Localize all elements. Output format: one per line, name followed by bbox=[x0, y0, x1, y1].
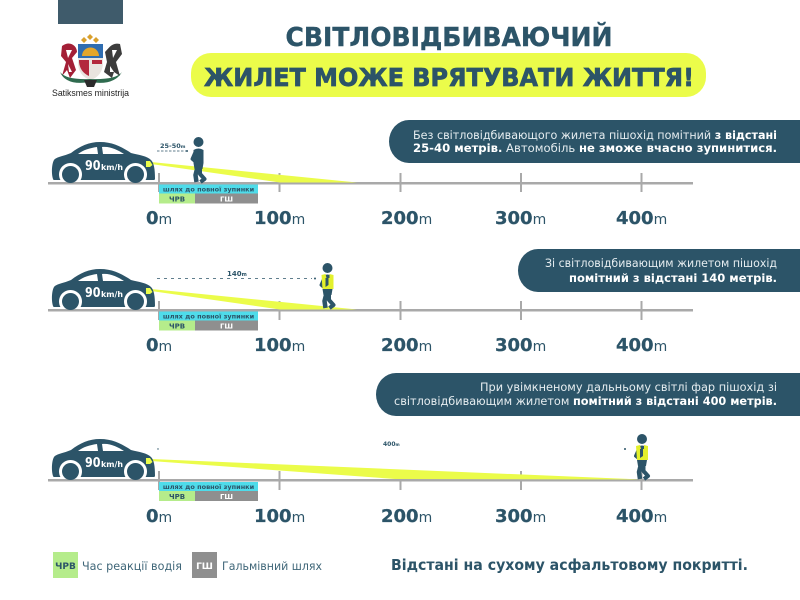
distance labels 1: 400m bbox=[616, 208, 667, 229]
road axis 1 bbox=[48, 173, 693, 192]
callout 3: При увімкненому дальньому світлі фар пішохід зі bbox=[480, 381, 777, 394]
callout 3 bbox=[376, 373, 800, 416]
stopping distance bars 1: ЧРВ bbox=[169, 196, 185, 204]
car 1 bbox=[52, 142, 155, 183]
distance labels 2: 100m bbox=[254, 335, 305, 356]
legend item: reaction time: Час реакції водія bbox=[82, 559, 182, 573]
distance labels 1: 100m bbox=[254, 208, 305, 229]
stopping distance bars 2: ЧРВ bbox=[169, 322, 185, 330]
legend item: reaction time: ЧРВ bbox=[55, 562, 76, 572]
stopping distance bars 3: ЧРВ bbox=[169, 493, 185, 501]
callout 3: світловідбивающим жилетом помітний з відстані 400 метрів. bbox=[394, 395, 777, 408]
distance labels 3 bbox=[146, 506, 667, 527]
distance labels 3: 0m bbox=[146, 506, 172, 527]
callout 2: помітний з відстані 140 метрів. bbox=[569, 272, 777, 285]
headlight beam 1 bbox=[151, 162, 357, 182]
callout 1 bbox=[389, 120, 800, 163]
distance labels 1: 0m bbox=[146, 208, 172, 229]
headline pill: ЖИЛЕТ МОЖЕ ВРЯТУВАТИ ЖИТТЯ! bbox=[204, 63, 694, 92]
car 2: km/h bbox=[101, 290, 123, 299]
pedestrian 1 bbox=[192, 137, 204, 182]
panel: scenario 2 bbox=[48, 249, 800, 356]
callout 1: 25-40 метрів. Автомобіль не зможе вчасно зупинитися. bbox=[413, 142, 777, 155]
logo caption: Satiksmes ministrija bbox=[52, 87, 130, 98]
distance marker 2: 140m bbox=[227, 270, 247, 278]
distance labels 3: 400m bbox=[616, 506, 667, 527]
callout 1: Без світловідбивающого жилета пішохід помітний з відстані bbox=[413, 129, 777, 142]
legend bbox=[53, 552, 322, 578]
legend item: reaction time bbox=[53, 552, 182, 578]
distance labels 3: 100m bbox=[254, 506, 305, 527]
headlight beam 3 bbox=[151, 459, 642, 480]
stopping distance bars 2 bbox=[159, 312, 258, 330]
distance labels 1 bbox=[146, 208, 667, 229]
headlight beam 2 bbox=[151, 289, 357, 310]
distance marker 1 bbox=[157, 142, 188, 152]
distance labels 1: 300m bbox=[495, 208, 546, 229]
stopping distance bars 2: ГШ bbox=[220, 322, 233, 330]
distance marker 3: 400m bbox=[383, 441, 400, 448]
stopping distance bars 3 bbox=[159, 482, 258, 501]
car 2: 90 bbox=[85, 286, 100, 301]
road axis 2 bbox=[48, 301, 693, 320]
car 3: km/h bbox=[101, 460, 123, 469]
distance labels 2: 400m bbox=[616, 335, 667, 356]
legend item: braking distance bbox=[192, 552, 322, 578]
pedestrian 2 bbox=[321, 263, 334, 308]
distance labels 2: 300m bbox=[495, 335, 546, 356]
distance labels 3: 200m bbox=[381, 506, 432, 527]
top logo tab bbox=[58, 0, 123, 24]
distance labels 2: 200m bbox=[381, 335, 432, 356]
distance labels 2: 0m bbox=[146, 335, 172, 356]
pedestrian 3 bbox=[636, 434, 648, 479]
legend item: braking distance: ГШ bbox=[196, 562, 213, 572]
stopping distance bars 1: шлях до повної зупинки bbox=[163, 186, 255, 194]
callout 2 bbox=[518, 249, 800, 292]
panel: scenario 1 bbox=[48, 120, 800, 229]
logo: coat of arms bbox=[60, 34, 122, 87]
car 1: 90 bbox=[85, 159, 100, 174]
headline pill bbox=[191, 53, 706, 97]
distance labels 2 bbox=[146, 335, 667, 356]
stopping distance bars 2: шлях до повної зупинки bbox=[163, 312, 255, 320]
distance labels 3: 300m bbox=[495, 506, 546, 527]
car 2 bbox=[52, 269, 155, 310]
footnote: Відстані на сухому асфальтовому покритті. bbox=[391, 556, 748, 574]
car 3 bbox=[52, 439, 155, 480]
callout 2: Зі світловідбивающим жилетом пішохід bbox=[545, 257, 777, 270]
title: СВІТЛОВІДБИВАЮЧИЙ bbox=[286, 21, 612, 53]
stopping distance bars 3: ГШ bbox=[220, 493, 233, 501]
car 3: 90 bbox=[85, 456, 100, 471]
stopping distance bars 3: шлях до повної зупинки bbox=[163, 483, 255, 491]
legend item: braking distance: Гальмівний шлях bbox=[222, 559, 322, 573]
road axis 3 bbox=[48, 471, 693, 490]
car 1: km/h bbox=[101, 163, 123, 172]
stopping distance bars 1: ГШ bbox=[220, 196, 233, 204]
distance marker 1: 25-50m bbox=[160, 142, 186, 150]
distance labels 1: 200m bbox=[381, 208, 432, 229]
panel: scenario 3 bbox=[48, 373, 800, 527]
stopping distance bars 1 bbox=[159, 184, 258, 204]
icon: stars bbox=[81, 34, 99, 43]
